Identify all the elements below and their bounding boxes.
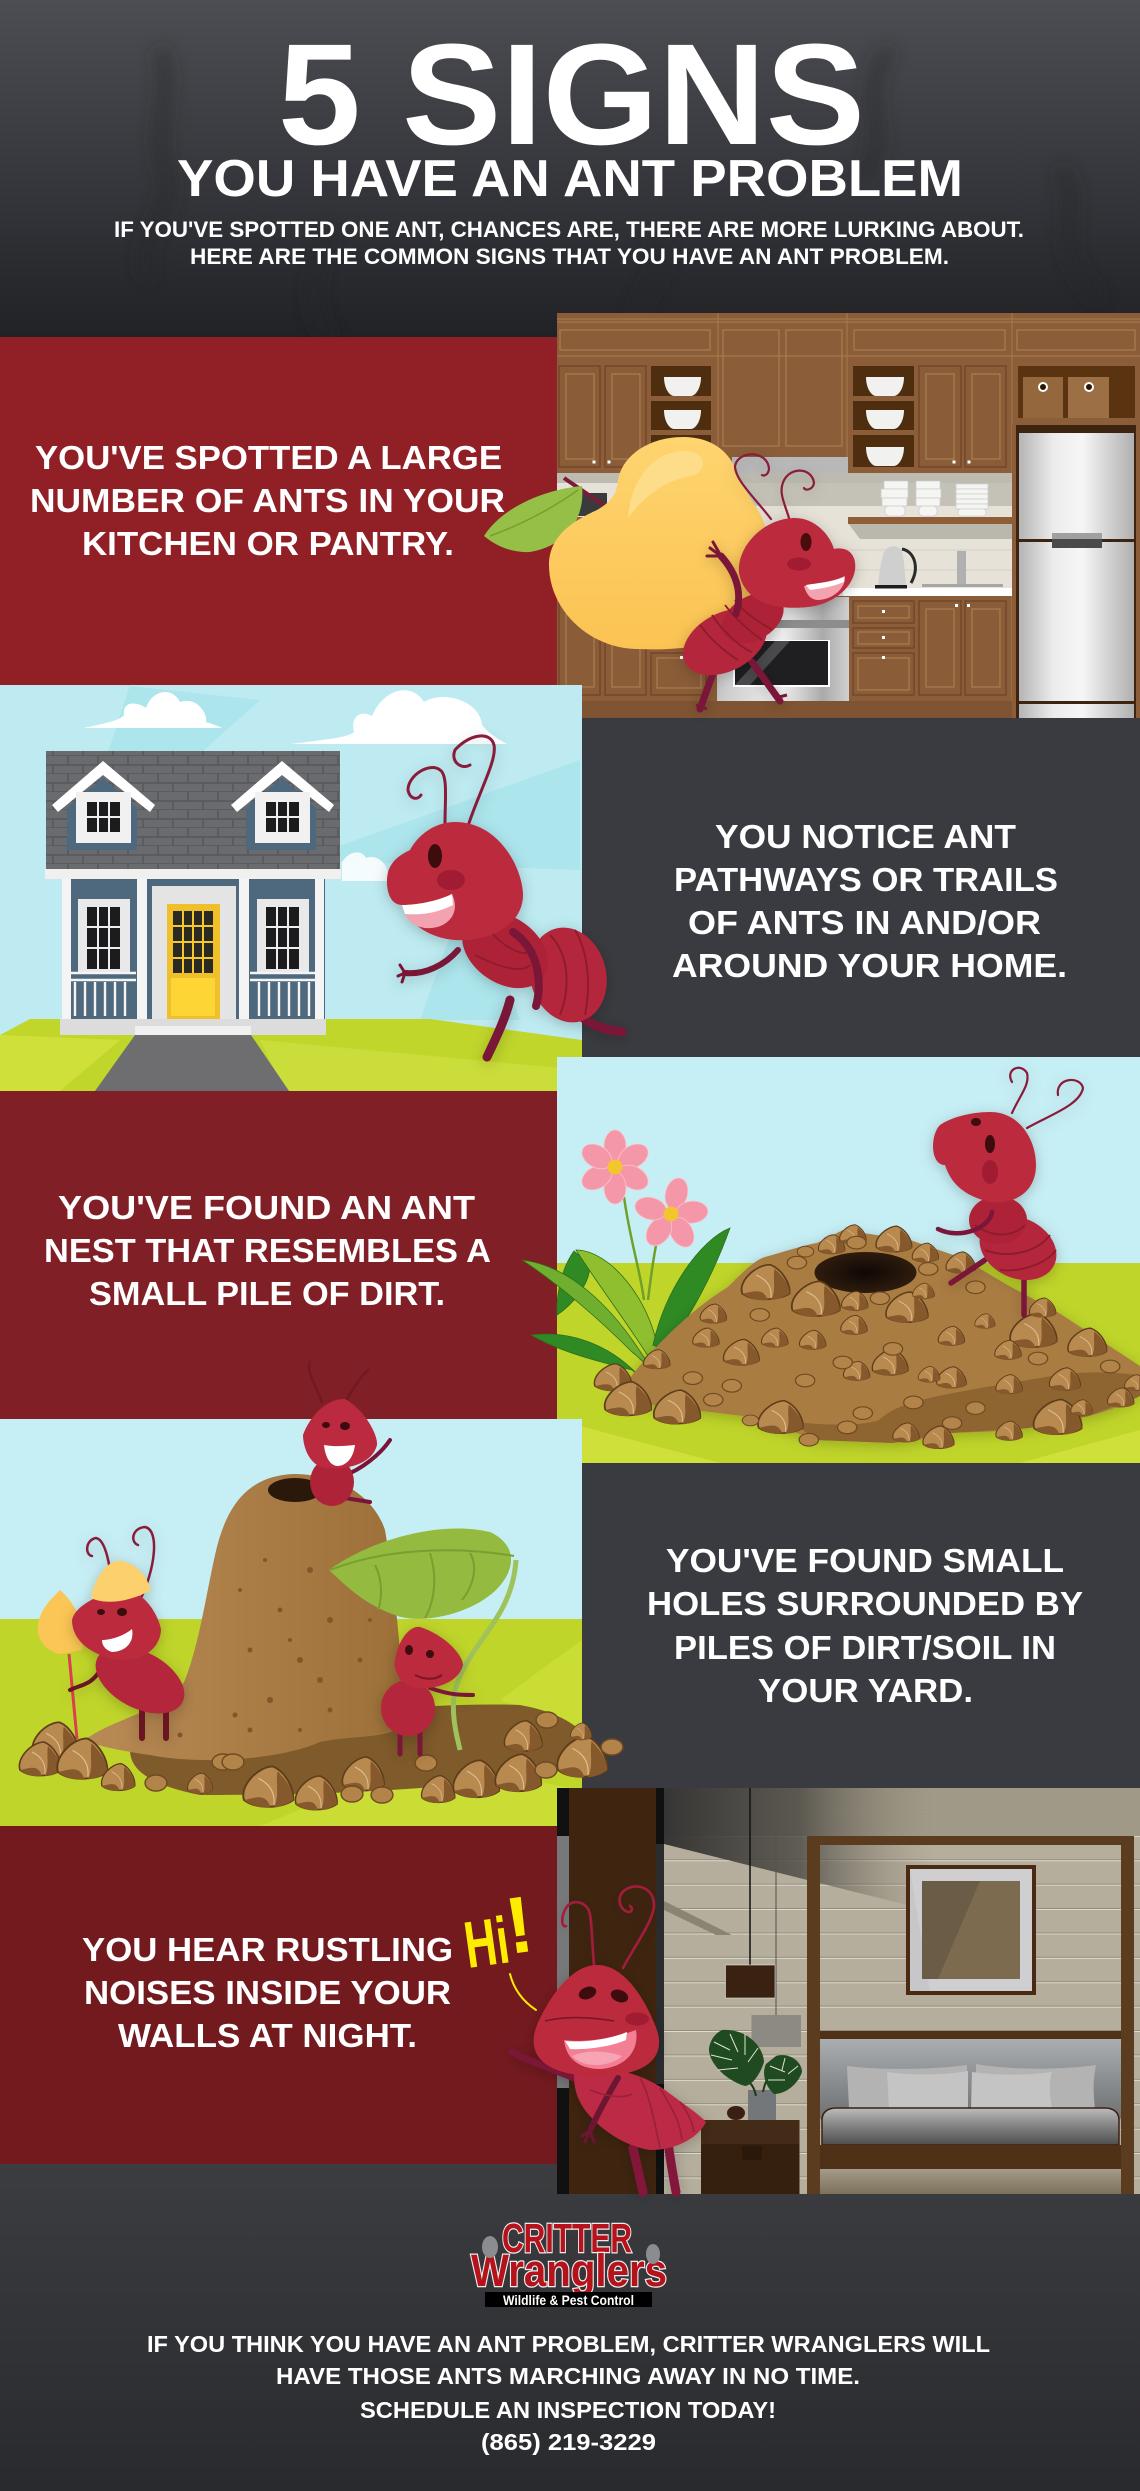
driveway (95, 1035, 289, 1091)
logo wordmark (471, 2215, 667, 2296)
tower speckle (178, 1558, 392, 1738)
foundation and steps (60, 1019, 326, 1035)
mound shadow band (790, 1372, 1140, 1443)
ant: saying hi (512, 1886, 706, 2192)
sign 4 text: YOUR YARD. (758, 1672, 973, 1709)
sign 5 text (82, 1931, 453, 2054)
pillows (847, 2064, 1096, 2108)
plant leaves (522, 1228, 730, 1375)
sign 3 text: SMALL PILE OF DIRT. (89, 1275, 445, 1312)
fridge (1012, 425, 1140, 718)
shovel (38, 1590, 83, 1739)
nest hole (814, 1252, 916, 1293)
sign 2 text: OF ANTS IN AND/OR (688, 904, 1041, 941)
panel: sign 2 dark text (582, 718, 1140, 1057)
sign 4 text: HOLES SURROUNDED BY (647, 1585, 1083, 1622)
closing text (147, 2331, 990, 2455)
sign 2 text: YOU NOTICE ANT (715, 818, 1016, 855)
pillar (557, 1788, 664, 2194)
closing text: SCHEDULE AN INSPECTION TODAY! (360, 2397, 776, 2423)
closing text: HAVE THOSE ANTS MARCHING AWAY IN NO TIME. (276, 2363, 860, 2389)
sign 3 text (44, 1189, 491, 1312)
dirt base (130, 1704, 590, 1795)
stacked dishes (881, 481, 988, 516)
ant: holding leaf (381, 1627, 473, 1754)
intro text: HERE ARE THE COMMON SIGNS THAT YOU HAVE AN ANT PROBLEM. (190, 244, 949, 269)
paw prints (482, 2236, 660, 2264)
closing text: (865) 219-3229 (481, 2429, 656, 2455)
rocks on mound (594, 1225, 1140, 1449)
logo: critter wranglers (471, 2215, 667, 2308)
illustration: dirt pile scene (522, 1057, 1140, 1463)
porch windows, door and columns (62, 879, 324, 1019)
footer background (0, 2160, 1140, 2491)
sign 3 text: YOU'VE FOUND AN ANT (58, 1189, 475, 1226)
panel: sign 5 red text (0, 1826, 557, 2164)
monstera leaves (709, 2030, 764, 2086)
ant: wearing hard hat (70, 1527, 196, 1738)
framed picture (906, 1865, 1036, 1995)
hi speech text: Hi (460, 1902, 514, 1982)
sign 3 text: NEST THAT RESEMBLES A (44, 1232, 491, 1269)
sign 4 text: YOU'VE FOUND SMALL (666, 1542, 1064, 1579)
pendant lamps (726, 1788, 801, 2047)
intro text: IF YOU'VE SPOTTED ONE ANT, CHANCES ARE, THERE ARE MORE LURKING ABOUT. (114, 217, 1024, 242)
upper cabinets (559, 366, 1006, 695)
panel: sign 4 dark text (582, 1463, 1140, 1788)
subtitle: YOU HAVE AN ANT PROBLEM (177, 150, 963, 208)
speech tick (510, 1974, 536, 2010)
logo tagline: Wildlife & Pest Control (503, 2292, 634, 2308)
flowers (577, 1130, 709, 1300)
tower hole (268, 1478, 322, 1502)
kettle and faucet (875, 546, 1003, 588)
sign 1 text (30, 439, 505, 562)
sign 2 text (672, 818, 1067, 984)
logo wordmark: CRITTER (502, 2215, 632, 2261)
hi speech text: ! (500, 1879, 538, 1971)
header background (0, 0, 1140, 345)
title: 5 signs: 5 SIGNS (278, 14, 865, 175)
clouds (84, 690, 507, 881)
illustration: yard hole scene (0, 1419, 623, 1826)
body (672, 454, 855, 709)
ant: walking toward house (387, 736, 622, 1057)
house (45, 751, 341, 1035)
storage boxes (1018, 366, 1135, 418)
rocks around base (19, 1712, 623, 1810)
ant: waving on top of tower (303, 1362, 390, 1506)
intro text (114, 217, 1024, 269)
cabinet door insets (560, 330, 1135, 690)
leaf shield (329, 1528, 516, 1750)
lawn (0, 1019, 582, 1091)
illustration: kitchen (557, 313, 1140, 718)
wall shadow (664, 1788, 1140, 1935)
dirt mound (609, 1230, 1140, 1443)
illustration: house scene (0, 685, 582, 1091)
closing text: IF YOU THINK YOU HAVE AN ANT PROBLEM, CRITTER WRANGLERS WILL (147, 2331, 990, 2357)
illustration: bedroom (557, 1788, 1140, 2194)
sign 2 text: PATHWAYS OR TRAILS (674, 861, 1058, 898)
nightstand and plant (701, 2030, 802, 2194)
cabinet knobs (592, 460, 970, 659)
sign 5 text: NOISES INSIDE YOUR (84, 1974, 451, 2011)
backsplash and counter (557, 457, 1012, 596)
panel: sign 3 red text (0, 1091, 557, 1419)
bed (807, 1836, 1134, 2194)
dirt tower (84, 1474, 405, 1760)
dormers (52, 761, 334, 850)
sign 2 text: AROUND YOUR HOME. (672, 947, 1067, 984)
panel: sign 1 red text (0, 337, 557, 685)
pear (484, 437, 767, 649)
sign 1 text: NUMBER OF ANTS IN YOUR (30, 482, 505, 519)
sign 1 text: KITCHEN OR PANTRY. (82, 525, 454, 562)
sign 5 text: YOU HEAR RUSTLING (82, 1931, 453, 1968)
oven (717, 597, 849, 701)
sign 5 text: WALLS AT NIGHT. (118, 2017, 417, 2054)
ant: carrying pear (484, 437, 855, 709)
sign 4 text (647, 1542, 1083, 1709)
open shelves with bowls (651, 366, 914, 467)
sign 4 text: PILES OF DIRT/SOIL IN (674, 1629, 1056, 1666)
logo wordmark: Wranglers (471, 2245, 667, 2296)
ant: on dirt pile (933, 1068, 1083, 1315)
sign 1 text: YOU'VE SPOTTED A LARGE (35, 439, 502, 476)
